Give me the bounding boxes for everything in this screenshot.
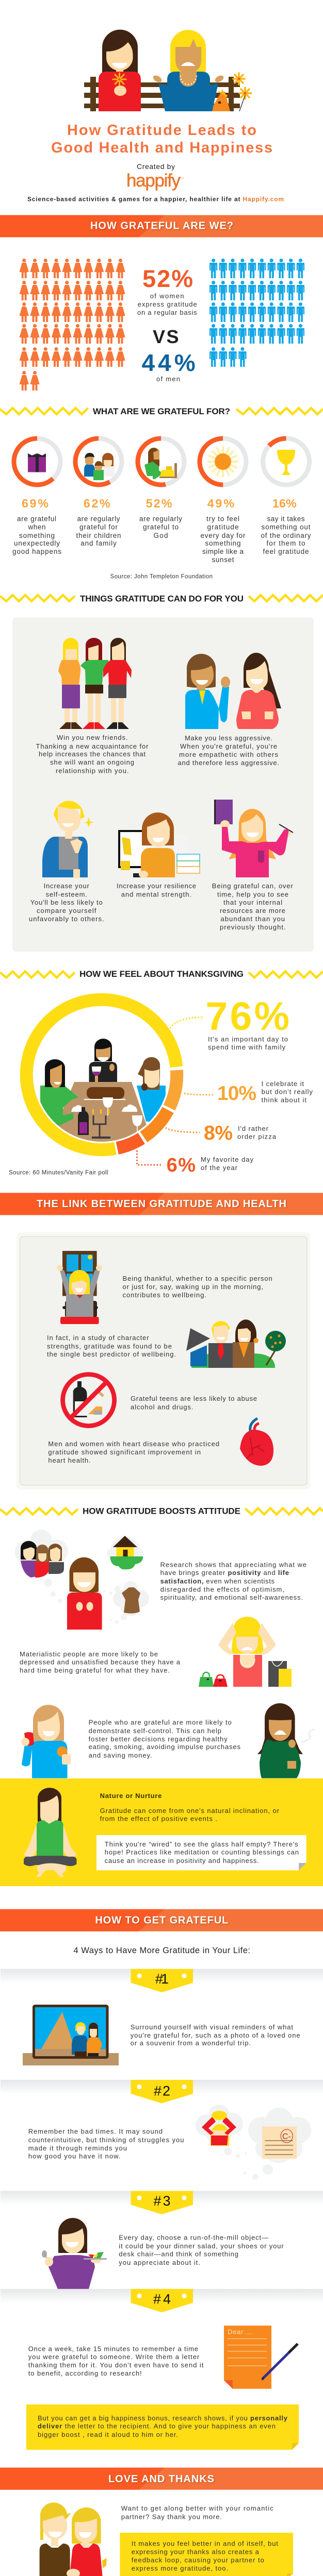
stat: 6 percent — [137, 1150, 254, 1176]
text: make you less aggressive: When you're grateful, you're — [180, 742, 277, 750]
text: study of character strengths: the single best predictor of wellbeing. — [47, 1350, 176, 1358]
banner: how grateful are we: HOW GRATEFUL ARE WE? — [90, 221, 233, 232]
text: increase your self-esteem: compare yourself — [37, 907, 96, 914]
comparison statistics: VS — [153, 326, 179, 347]
text: being grateful over time: that your internal — [223, 899, 282, 906]
text: win you new friends — [36, 734, 149, 775]
text: write a letter: to benefit, according to research! — [28, 2369, 142, 2377]
illustration: letter and pen — [224, 2326, 298, 2389]
illustration: woman eating apple — [21, 1705, 71, 1778]
ring chart captions: and family — [80, 539, 117, 547]
text: remember the bad times — [28, 2128, 184, 2160]
happify logo: TM — [181, 177, 184, 179]
ring chart captions: God — [154, 532, 168, 539]
text: materialistic people: depressed and unsatisfied because they have a — [20, 1658, 181, 1666]
text: research shows: satisfaction, even when scientists — [160, 1578, 274, 1585]
text: run-of-the-mill object: Every day, choose a run-of-the-mill object— — [119, 2234, 268, 2241]
stat: 8 percent: 8% — [204, 1122, 233, 1144]
illustration: remembering a bad grade: C- — [282, 2132, 291, 2141]
ring chart captions: something — [19, 532, 55, 539]
text: grateful teens: alcohol and drugs. — [131, 1403, 193, 1411]
tip number 2 ribbon: #2 — [154, 2083, 170, 2099]
text: want to get along better: Want to get along better with your romantic — [121, 2504, 273, 2512]
note: happiness bonus: bigger boost , read it aloud to him or her. — [38, 2431, 178, 2438]
text: make you less aggressive: more empathetic with others — [179, 751, 279, 758]
text: materialistic people: Materialistic people are more likely to be — [20, 1650, 158, 1658]
note: feedback loop: It makes you feel better in and of itself, but — [132, 2539, 278, 2547]
note: happiness bonus — [26, 2404, 299, 2450]
text: study of character strengths: In fact, in a study of character — [47, 1334, 149, 1342]
illustration: woman at monitor, resilience — [118, 812, 200, 878]
text: nature or nurture: from the effect of positive events . — [100, 1815, 217, 1823]
text: self-control — [89, 1719, 240, 1759]
text: remember the bad times: counterintuitive, but thinking of struggles you — [28, 2136, 184, 2144]
ring 62 percent with family icon — [75, 438, 122, 485]
banner: the link between gratitude and health: THE LINK BETWEEN GRATITUDE AND HEALTH — [37, 1198, 286, 1210]
tip number 4 ribbon: #4 — [153, 2292, 171, 2307]
panel: nature or nurture — [0, 1778, 323, 1886]
illustration: heart — [240, 1418, 273, 1466]
ring chart captions: gratitude — [207, 523, 238, 531]
comparison statistics: 52% — [142, 265, 193, 292]
stat: 76 percent: 76% — [205, 994, 289, 1039]
text: being thankful: contributes to wellbeing. — [123, 1291, 206, 1299]
text: being thankful — [123, 1275, 272, 1299]
hero illustration: two women on a bench — [84, 30, 251, 111]
comparison statistics: 44% — [142, 349, 196, 376]
ring chart percentages: 62% — [84, 497, 110, 510]
banner: how to get grateful: HOW TO GET GRATEFUL — [95, 1915, 228, 1926]
stat: 8 percent: order pizza — [237, 1133, 277, 1141]
ring chart captions: say it takes — [267, 515, 305, 523]
illustration: two women, less aggressive — [185, 653, 281, 729]
stat: 6 percent: My favorite day — [201, 1156, 254, 1163]
text: win you new friends: Thanking a new acquaintance for — [36, 742, 149, 750]
comparison statistics — [137, 265, 197, 383]
section heading: what are we grateful for: WHAT ARE WE GRATEFUL FOR? — [93, 406, 230, 416]
illustration: man with star, self-esteem — [42, 801, 94, 878]
note: wired to see the glass half empty — [96, 1835, 306, 1870]
note: feedback loop: expressing your thanks also creates a — [132, 2548, 260, 2556]
text: make you less aggressive: Make you less aggressive. — [185, 734, 272, 742]
text: increase your self-esteem: self-esteem. — [46, 890, 87, 898]
note: wired to see the glass half empty: hope! Practices like meditation or counting blessings can — [105, 1849, 299, 1856]
ring chart captions: for them to — [266, 539, 305, 547]
text: increase your self-esteem: You'll be less likely to — [30, 899, 103, 906]
ring chart captions: are regularly — [139, 515, 182, 523]
text: increase your self-esteem — [29, 882, 104, 923]
ring chart captions: sunset — [212, 556, 234, 564]
text: win you new friends: she will want an ongoing — [50, 758, 134, 766]
ring chart captions: feel gratitude — [263, 548, 309, 555]
text: being grateful over time: resources are more — [220, 907, 285, 914]
text: write a letter: Once a week, take 15 minutes to remember a time — [28, 2345, 198, 2352]
text: being grateful over time: abundant than you — [221, 915, 285, 923]
stat: 6 percent: 6% — [167, 1155, 196, 1176]
text: being grateful over time: previously thought. — [220, 923, 286, 931]
ring chart captions: something out — [261, 523, 311, 531]
text: make you less aggressive: and therefore less aggressive. — [177, 759, 279, 767]
ring chart captions: unexpectedly — [14, 539, 60, 547]
created by: Created by — [137, 162, 175, 171]
ring 69 percent with gift icon — [14, 438, 60, 485]
title: Good Health and Happiness — [51, 140, 272, 156]
tip number 3 ribbon — [1, 2191, 323, 2214]
ring chart percentages: 49% — [207, 497, 234, 510]
section heading: things gratitude can do for you — [0, 594, 323, 604]
ring chart captions: grateful to — [143, 523, 179, 531]
note: feedback loop — [120, 2533, 293, 2576]
comparison statistics: of men — [156, 375, 180, 383]
text: heart disease — [48, 1440, 219, 1464]
illustration: woman thinking of family, home and pet — [15, 1530, 149, 1630]
comparison statistics: express gratitude — [138, 300, 197, 308]
illustration: three friends — [58, 638, 132, 729]
illustration: meditating woman — [24, 1788, 76, 1877]
note: happiness bonus: But you can get a big happiness bonus, research shows, if you personally — [38, 2414, 288, 2422]
title: How Gratitude Leads to — [67, 122, 256, 139]
illustration: woman with book and pencil, abundance — [214, 800, 293, 877]
text: surround yourself: or a souvenir from a wonderful trip. — [131, 2039, 251, 2047]
illustration: woman appreciating salad — [42, 2218, 107, 2289]
text: surround yourself — [131, 2023, 300, 2047]
happify logo: happify — [126, 171, 181, 191]
text: heart disease: gratitude showed significant improvement in — [48, 1448, 201, 1456]
stat: 76 percent: It's an important day to — [208, 1036, 288, 1043]
text: surround yourself: you're grateful for, such as a photo of a loved one — [131, 2031, 300, 2039]
title — [51, 122, 272, 156]
donut chart: thanksgiving feelings — [26, 999, 177, 1150]
stat: 76 percent: spend time with family — [208, 1043, 286, 1051]
stat: 10 percent: but don't really — [262, 1088, 313, 1095]
text: research shows: disregarded the effects of optimism, — [160, 1586, 284, 1593]
section heading: how we feel about thanksgiving — [0, 969, 323, 979]
note: feedback loop: express more gratitude, too. — [132, 2565, 228, 2572]
text: increase your self-esteem: unfavorably to others. — [29, 915, 104, 923]
note: happiness bonus: deliver the letter to the recipient. And to give your happiness an even — [38, 2422, 276, 2430]
text: write a letter: you were grateful to someone. Write them a letter — [28, 2353, 200, 2361]
text: study of character strengths: strengths, gratitude was found to be — [47, 1343, 172, 1350]
text: heart disease: Men and women with heart disease who practiced — [48, 1440, 219, 1448]
text: remember the bad times: how good you have it now. — [28, 2152, 121, 2160]
text: nature or nurture — [100, 1792, 280, 1823]
subheading: 4 ways: 4 Ways to Have More Gratitude in Your Life: — [73, 1946, 250, 1955]
text: research shows: spirituality, and emotional self-awareness. — [160, 1594, 303, 1601]
comparison statistics: on a regular basis — [137, 309, 197, 316]
text: being thankful: or just for, say, waking up in the morning, — [123, 1283, 263, 1291]
panel: things gratitude can do — [12, 618, 314, 952]
note: wired to see the glass half empty: Think you're “wired” to see the glass half empty? There's — [105, 1840, 298, 1848]
ring chart captions: of the ordinary — [261, 532, 311, 539]
stat: 10 percent: think about it — [262, 1096, 306, 1104]
source: John Templeton Foundation: Source: John Templeton Foundation — [110, 574, 213, 580]
text: being thankful: Being thankful, whether to a specific person — [123, 1275, 272, 1282]
banner: love and thanks — [0, 2468, 323, 2490]
banner: the link between gratitude and health — [0, 1193, 323, 1215]
panel: gratitude and health — [17, 1232, 310, 1489]
text: run-of-the-mill object: desk chair—and think of something — [119, 2250, 238, 2258]
text: make you less aggressive — [177, 734, 279, 767]
ring chart percentages — [22, 497, 297, 510]
source: 60 Minutes poll: Source: 60 Minutes/Vanity Fair poll — [9, 1170, 108, 1176]
ring chart captions — [12, 515, 311, 564]
text: heart disease: heart health. — [48, 1456, 91, 1464]
stat: 10 percent: 10% — [217, 1082, 256, 1105]
text: self-control: eating, smoking, avoiding impulse purchases — [89, 1743, 240, 1751]
text: grateful teens — [131, 1395, 257, 1411]
text: want to get along better: partner? Say thank you more. — [121, 2513, 222, 2521]
illustration: remembering a bad grade — [196, 2105, 311, 2180]
text: want to get along better — [121, 2504, 273, 2521]
ring chart captions: try to feel — [206, 515, 239, 523]
text: research shows — [160, 1561, 306, 1601]
text: win you new friends: relationship with you. — [56, 767, 129, 775]
stat: 10 percent: I celebrate it — [262, 1080, 304, 1088]
text: self-control: foster better decisions regarding healthy — [89, 1735, 228, 1743]
ring 49 percent with sun icon — [200, 438, 246, 485]
note: wired to see the glass half empty: cause an increase in positivity and happiness. — [105, 1857, 259, 1865]
illustration: no alcohol or drugs sign — [63, 1375, 115, 1426]
text: resilience — [117, 882, 196, 898]
text: write a letter — [28, 2345, 204, 2377]
comparison statistics: of women — [150, 292, 184, 300]
pictogram: women 52 percent — [20, 259, 125, 391]
text: run-of-the-mill object: you appreciate about it. — [119, 2259, 200, 2266]
text: self-control: and saving money. — [89, 1752, 152, 1759]
illustration: letter and pen: Dear ... — [228, 2328, 252, 2336]
ring chart row — [14, 438, 310, 485]
illustration: framed vacation photo — [23, 2006, 119, 2065]
ring chart percentages: 52% — [146, 497, 172, 510]
text: increase your self-esteem: Increase your — [44, 882, 90, 890]
ring chart captions: something — [205, 539, 240, 547]
ring chart captions: grateful for — [79, 523, 118, 531]
ring chart captions: their children — [76, 532, 121, 539]
ring chart percentages: 16% — [272, 497, 297, 510]
stat: 10 percent — [184, 1080, 313, 1105]
text: win you new friends: Win you new friends. — [57, 734, 128, 741]
section heading: how we feel about thanksgiving: HOW WE FEEL ABOUT THANKSGIVING — [79, 969, 244, 979]
tip number 3 ribbon: #3 — [154, 2193, 170, 2209]
tip number 1 ribbon: #1 — [155, 1971, 169, 1987]
text: nature or nurture: Gratitude can come from one's natural inclination, or — [100, 1807, 280, 1815]
text: grateful teens: Grateful teens are less likely to abuse — [131, 1395, 257, 1402]
text: self-control: demonstrate self-control. This can help — [89, 1727, 221, 1735]
tagline: Science-based activities & games for a happier, healthier life at Happify.com — [27, 196, 284, 203]
text: research shows: Research shows that appreciating what we — [160, 1561, 306, 1568]
stat: 6 percent: of the year — [201, 1164, 238, 1172]
text: research shows: have brings greater positivity and life — [160, 1569, 289, 1577]
illustration: couple with house and tree — [186, 1319, 286, 1368]
ring chart captions: every day for — [200, 532, 246, 539]
text: remember the bad times: Remember the bad times. It may sound — [28, 2128, 163, 2136]
text: being grateful over time — [212, 882, 293, 931]
text: remember the bad times: made it through reminds you — [28, 2144, 127, 2152]
banner: how to get grateful — [0, 1909, 323, 1931]
text: nature or nurture: Nature or Nurture — [100, 1792, 162, 1800]
illustration: stressed shopper with bags — [199, 1617, 292, 1687]
ring chart captions: simple like a — [202, 548, 244, 555]
text: surround yourself: Surround yourself with visual reminders of what — [131, 2023, 293, 2031]
ring chart captions: good happens — [12, 548, 61, 555]
text: materialistic people — [20, 1650, 181, 1674]
banner: love and thanks: LOVE AND THANKS — [108, 2473, 214, 2485]
text: resilience: Increase your resilience — [117, 882, 196, 890]
section heading: what are we grateful for — [0, 406, 323, 416]
section heading: things gratitude can do for you: THINGS GRATITUDE CAN DO FOR YOU — [80, 594, 244, 604]
text: being grateful over time: time, help you to see — [217, 890, 288, 898]
tip number 1 ribbon — [1, 1969, 323, 1992]
illustration: woman smoking — [257, 1703, 315, 1778]
stat: 76 percent — [170, 994, 289, 1051]
ring chart captions: are grateful — [17, 515, 56, 523]
ring 52 percent with reading woman icon — [138, 438, 184, 485]
text: self-control: People who are grateful are more likely to — [89, 1719, 232, 1726]
text: study of character strengths — [47, 1334, 176, 1358]
illustration: happy couple — [40, 2502, 107, 2576]
illustration: woman stretching at window — [57, 1251, 102, 1324]
text: resilience: and mental strength. — [121, 890, 191, 898]
text: win you new friends: help increases the chances that — [39, 750, 146, 758]
note: feedback loop: feedback loop, causing your partner to — [132, 2556, 264, 2564]
ring chart captions: are regularly — [77, 515, 120, 523]
stat: 8 percent — [166, 1122, 277, 1144]
section heading: how gratitude boosts attitude — [0, 1506, 323, 1516]
tip number 2 ribbon — [1, 2080, 323, 2103]
text: run-of-the-mill object — [119, 2234, 284, 2266]
ring 16 percent with trophy icon — [263, 438, 310, 485]
text: being grateful over time: Being grateful can, over — [212, 882, 293, 890]
text: run-of-the-mill object: it could be your dinner salad, your shoes or your — [119, 2242, 284, 2250]
ring chart captions: when — [28, 523, 45, 531]
banner: how grateful are we — [0, 215, 323, 237]
text: write a letter: thanking them for it. You don't even have to send it — [28, 2361, 204, 2369]
tip number 4 ribbon — [1, 2289, 323, 2312]
illustration: family thanksgiving dinner — [40, 1039, 166, 1149]
stat: 8 percent: I'd rather — [238, 1125, 269, 1132]
pictogram: men 44 percent — [209, 259, 304, 367]
text: materialistic people: hard time being grateful for what they have. — [20, 1667, 170, 1674]
ring chart percentages: 69% — [22, 497, 49, 510]
section heading: how gratitude boosts attitude: HOW GRATITUDE BOOSTS ATTITUDE — [83, 1506, 240, 1516]
